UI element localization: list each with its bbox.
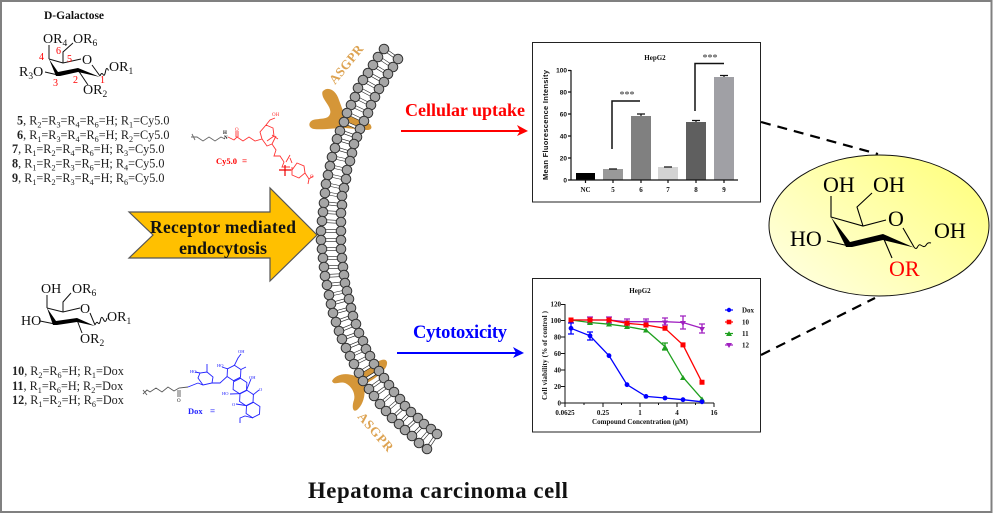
x axis labels	[580, 186, 726, 194]
receptor: top ASGPR	[309, 89, 371, 130]
x axis labels: 6	[639, 186, 643, 194]
structure: galactose second scaffold: OR1	[107, 310, 131, 327]
label: cytotoxicity: Cytotoxicity	[413, 323, 508, 343]
x axis labels: 4	[675, 409, 679, 417]
text block: compounds 5 to 9: 6, R1=R3=R4=R6=H; R2=Cy5.0	[17, 128, 169, 144]
structure: galactose with R groups	[19, 32, 133, 100]
structure: galactose second scaffold: OR6	[72, 282, 96, 299]
significance bracket 8 vs 9: ***	[702, 53, 718, 64]
structure: galactose with R groups: OR1	[109, 60, 133, 77]
legend: 12	[742, 342, 750, 350]
structure: galactose with R groups: OR2	[83, 83, 107, 100]
series 12	[571, 316, 705, 333]
arrow: cellular uptake	[401, 125, 528, 136]
text block: compounds 5 to 9: 9, R1=R2=R3=R4=H; R6=Cy5.0	[12, 171, 164, 186]
structure: galactose with R groups: 3	[53, 78, 58, 89]
y axis labels: 0	[558, 400, 562, 408]
structure: galactose second scaffold	[21, 282, 131, 349]
heading: D-Galactose: D-Galactose	[44, 10, 104, 22]
text block: compounds 5 to 9: 8, R1=R2=R3=R6=H; R4=Cy5.0	[12, 156, 164, 172]
structure: Cy5.0: O	[310, 175, 314, 180]
structure: Cy5.0: O	[235, 128, 239, 133]
structure: Dox: HO	[222, 391, 229, 396]
y axis labels	[550, 300, 562, 408]
receptor: bottom ASGPR	[332, 360, 387, 411]
y axis labels: 40	[560, 134, 567, 140]
y axis labels: 60	[560, 112, 567, 118]
arrow: receptor mediated endocytosis: Receptor mediated	[150, 217, 296, 237]
structure: Cy5.0: OH	[272, 113, 280, 118]
structure: galactose second scaffold: HO	[21, 314, 41, 329]
x axis labels: 8	[694, 186, 698, 194]
significance bracket 5 vs 6	[612, 90, 640, 149]
structure: Cy5.0	[191, 113, 314, 184]
structure: Cy5.0: Cy5.0	[216, 156, 237, 166]
x axis labels: 7	[666, 186, 670, 194]
y axis labels: 120	[550, 300, 562, 308]
zoom lines: dashed connectors	[761, 122, 878, 355]
structure: galactose with R groups: OR4	[43, 32, 67, 49]
x axis labels: 1	[638, 409, 642, 417]
structure: galactose second scaffold: OR2	[80, 332, 104, 349]
x axis labels: 0.25	[597, 409, 610, 417]
structure: Cy5.0: N	[224, 136, 228, 141]
panel: general structure ellipse	[769, 155, 989, 296]
structure: Cy5.0: H	[223, 131, 227, 136]
text block: compounds 5 to 9: 5, R2=R3=R4=R6=H; R1=Cy5.0	[17, 114, 169, 129]
series 10	[568, 318, 704, 385]
arrow: receptor mediated endocytosis: endocytosis	[179, 238, 267, 258]
structure: Dox: O	[232, 402, 236, 407]
text block: compounds 10 to 12: 11, R1=R6=H; R2=Dox	[12, 379, 123, 394]
structure: 2-O-substituted galactose: OH	[823, 172, 855, 197]
x axis labels: 5	[611, 186, 615, 194]
text block: compounds 5 to 9	[12, 114, 169, 186]
structure: 2-O-substituted galactose: OH	[873, 172, 905, 197]
bars	[576, 76, 734, 180]
y axis labels: 80	[560, 90, 567, 96]
structure: galactose with R groups: 1	[100, 75, 105, 86]
structure: 2-O-substituted galactose: OR	[889, 256, 920, 281]
legend: Dox	[742, 306, 755, 314]
structure: galactose with R groups: O	[82, 53, 92, 68]
structure: galactose with R groups: 2	[73, 75, 78, 86]
text block: compounds 10 to 12: 12, R1=R2=H; R6=Dox	[12, 393, 124, 408]
structure: galactose with R groups: R3O	[19, 65, 43, 82]
x axis labels	[555, 409, 718, 417]
arrow: receptor mediated endocytosis	[129, 188, 317, 281]
y axis title: Mean Fluorescence Intensity	[541, 69, 550, 180]
chart title: HepG2	[629, 287, 651, 295]
structure: Dox: O	[177, 399, 181, 404]
y axis labels: 60	[554, 350, 562, 358]
structure: galactose with R groups: 5	[67, 54, 72, 65]
structure: 2-O-substituted galactose: HO	[790, 226, 822, 251]
legend	[725, 306, 755, 350]
y axis labels: 0	[563, 178, 567, 184]
panel: fluorescence bar chart	[532, 42, 760, 202]
title: Hepatoma carcinoma cell: Hepatoma carcinoma cell	[308, 478, 568, 503]
legend: 11	[742, 330, 749, 338]
label: cellular uptake: Cellular uptake	[405, 100, 525, 120]
structure: Dox: O	[259, 387, 263, 392]
structure: galactose second scaffold: OH	[41, 282, 61, 297]
label: top ASGPR: ASGPR	[326, 41, 367, 87]
structure: 2-O-substituted galactose	[790, 172, 966, 281]
y axis labels: 100	[550, 317, 562, 325]
x axis labels: 16	[710, 409, 718, 417]
structure: Dox: HO	[217, 363, 224, 368]
y axis labels: 40	[554, 366, 562, 374]
axes	[568, 70, 738, 183]
structure: Cy5.0: =	[242, 156, 247, 166]
axes	[561, 304, 714, 407]
series 11	[571, 320, 705, 402]
panel: cell viability line chart	[532, 278, 760, 432]
structure: Dox: HO	[190, 369, 197, 374]
y axis labels	[556, 68, 567, 184]
label: bottom ASGPR: ASGPR	[355, 409, 397, 455]
y axis labels: 20	[554, 383, 562, 391]
chart title: HepG2	[644, 54, 666, 62]
text block: compounds 5 to 9: 7, R1=R2=R4=R6=H; R3=Cy5.0	[12, 142, 164, 158]
structure: Dox: Dox	[188, 406, 203, 416]
x axis labels: NC	[580, 186, 591, 194]
y axis labels: 80	[554, 334, 562, 342]
text block: compounds 10 to 12: 10, R2=R6=H; R1=Dox	[12, 364, 124, 380]
structure: galactose with R groups: 6	[56, 46, 61, 57]
y axis labels: 100	[556, 68, 567, 74]
structure: Dox: =	[210, 406, 215, 416]
arrow: cytotoxicity	[397, 347, 524, 358]
x axis labels: 9	[722, 186, 726, 194]
cell membrane lipid bilayer	[316, 44, 442, 454]
x axis title: Compound Concentration (µM)	[592, 418, 689, 426]
legend: 10	[742, 318, 750, 326]
y axis labels: 20	[560, 156, 567, 162]
significance bracket 5 vs 6: ***	[620, 90, 634, 101]
structure: galactose with R groups: 4	[39, 52, 44, 63]
structure: galactose with R groups: OR6	[73, 32, 97, 49]
structure: 2-O-substituted galactose: OH	[934, 218, 966, 243]
structure: 2-O-substituted galactose: O	[888, 206, 904, 231]
significance bracket 8 vs 9	[695, 53, 724, 111]
structure: Dox: OH	[238, 349, 245, 354]
x axis labels: 0.0625	[555, 409, 575, 417]
structure: Dox: OH	[249, 375, 256, 380]
y axis title: Cell viability (% of control )	[541, 310, 549, 400]
structure: galactose second scaffold: O	[80, 302, 90, 317]
structure: Dox	[143, 349, 263, 423]
series Dox	[568, 323, 704, 404]
text block: compounds 10 to 12	[12, 364, 124, 408]
